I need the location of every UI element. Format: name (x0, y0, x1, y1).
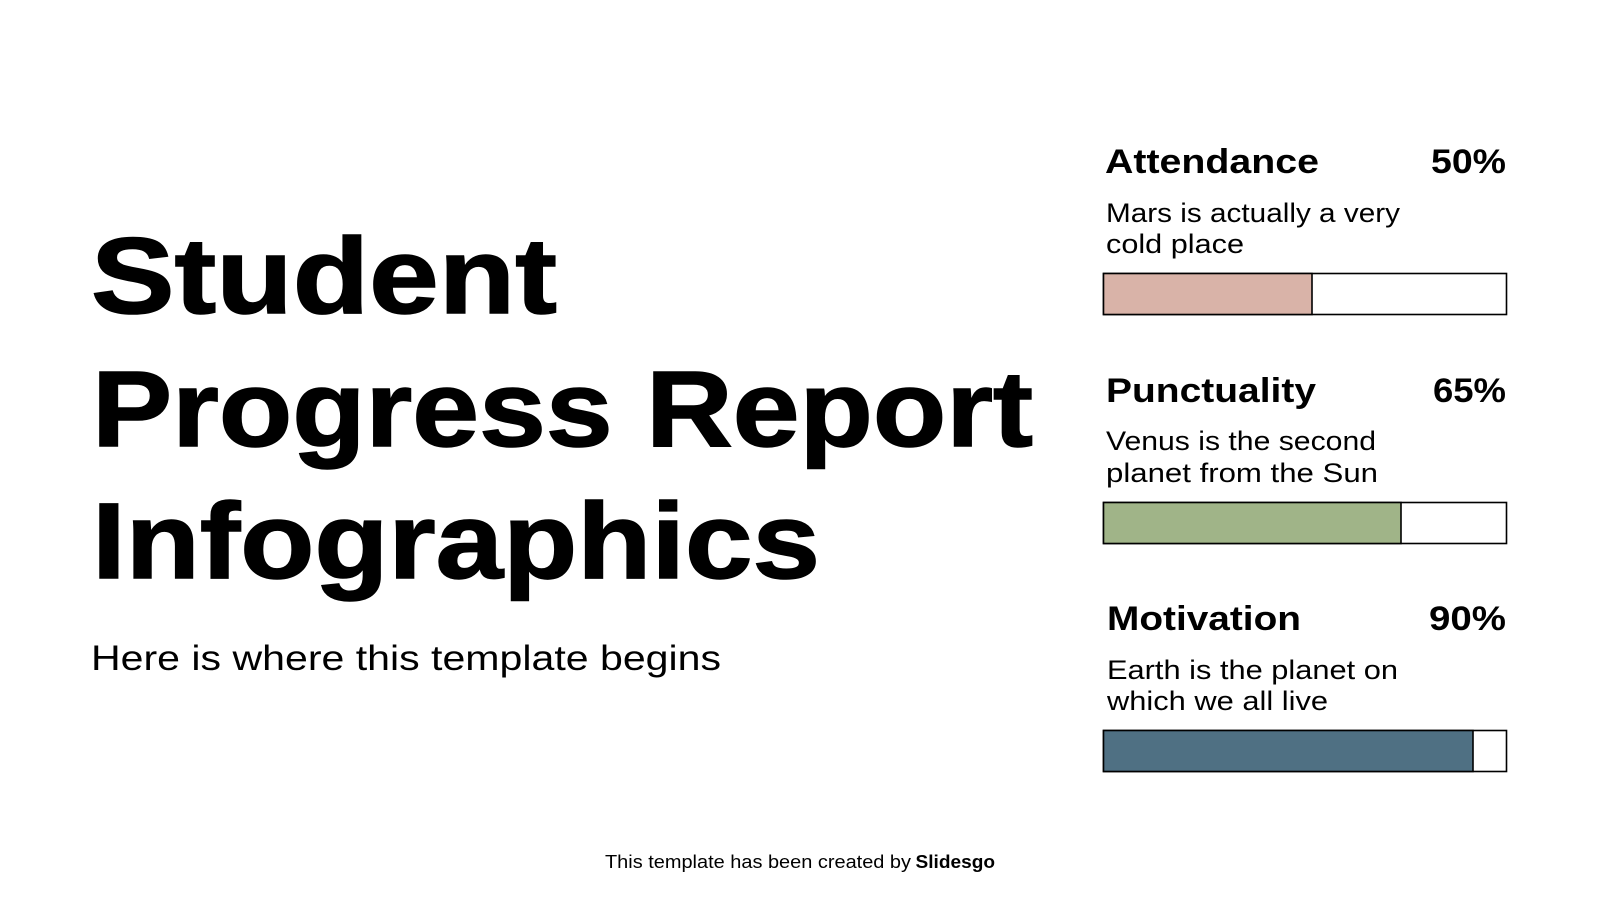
title: Student (91, 215, 557, 336)
progress bar: motivation 90% (1104, 730, 1506, 772)
heading: motivation: Motivation (1107, 600, 1301, 638)
description: attendance (1106, 198, 1401, 259)
panel: punctuality (1104, 372, 1506, 544)
panel: attendance (1104, 143, 1506, 314)
value: 90%: 90% (1429, 600, 1506, 638)
heading: punctuality: Punctuality (1106, 372, 1316, 410)
subtitle: Here is where this template begins (91, 639, 721, 678)
progress bar: punctuality 65% (1104, 502, 1506, 544)
value: 65%: 65% (1433, 372, 1506, 410)
description: attendance: Mars is actually a very (1106, 198, 1401, 228)
heading: attendance: Attendance (1105, 143, 1319, 181)
description: punctuality: Venus is the second (1106, 426, 1376, 456)
footer credit: Slidesgo (916, 852, 995, 872)
footer credit: This template has been created by (605, 852, 911, 872)
value: 50%: 50% (1431, 143, 1506, 181)
title: Infographics (92, 480, 820, 601)
description: punctuality (1106, 426, 1378, 488)
title: Progress Report (92, 348, 1033, 469)
description: motivation (1106, 655, 1398, 716)
description: attendance: cold place (1106, 229, 1244, 259)
progress bar: attendance 50% (1104, 274, 1506, 314)
description: motivation: Earth is the planet on (1107, 655, 1398, 685)
title (91, 215, 1033, 601)
panel: motivation (1104, 600, 1506, 772)
description: motivation: which we all live (1106, 686, 1328, 716)
description: punctuality: planet from the Sun (1106, 458, 1378, 488)
